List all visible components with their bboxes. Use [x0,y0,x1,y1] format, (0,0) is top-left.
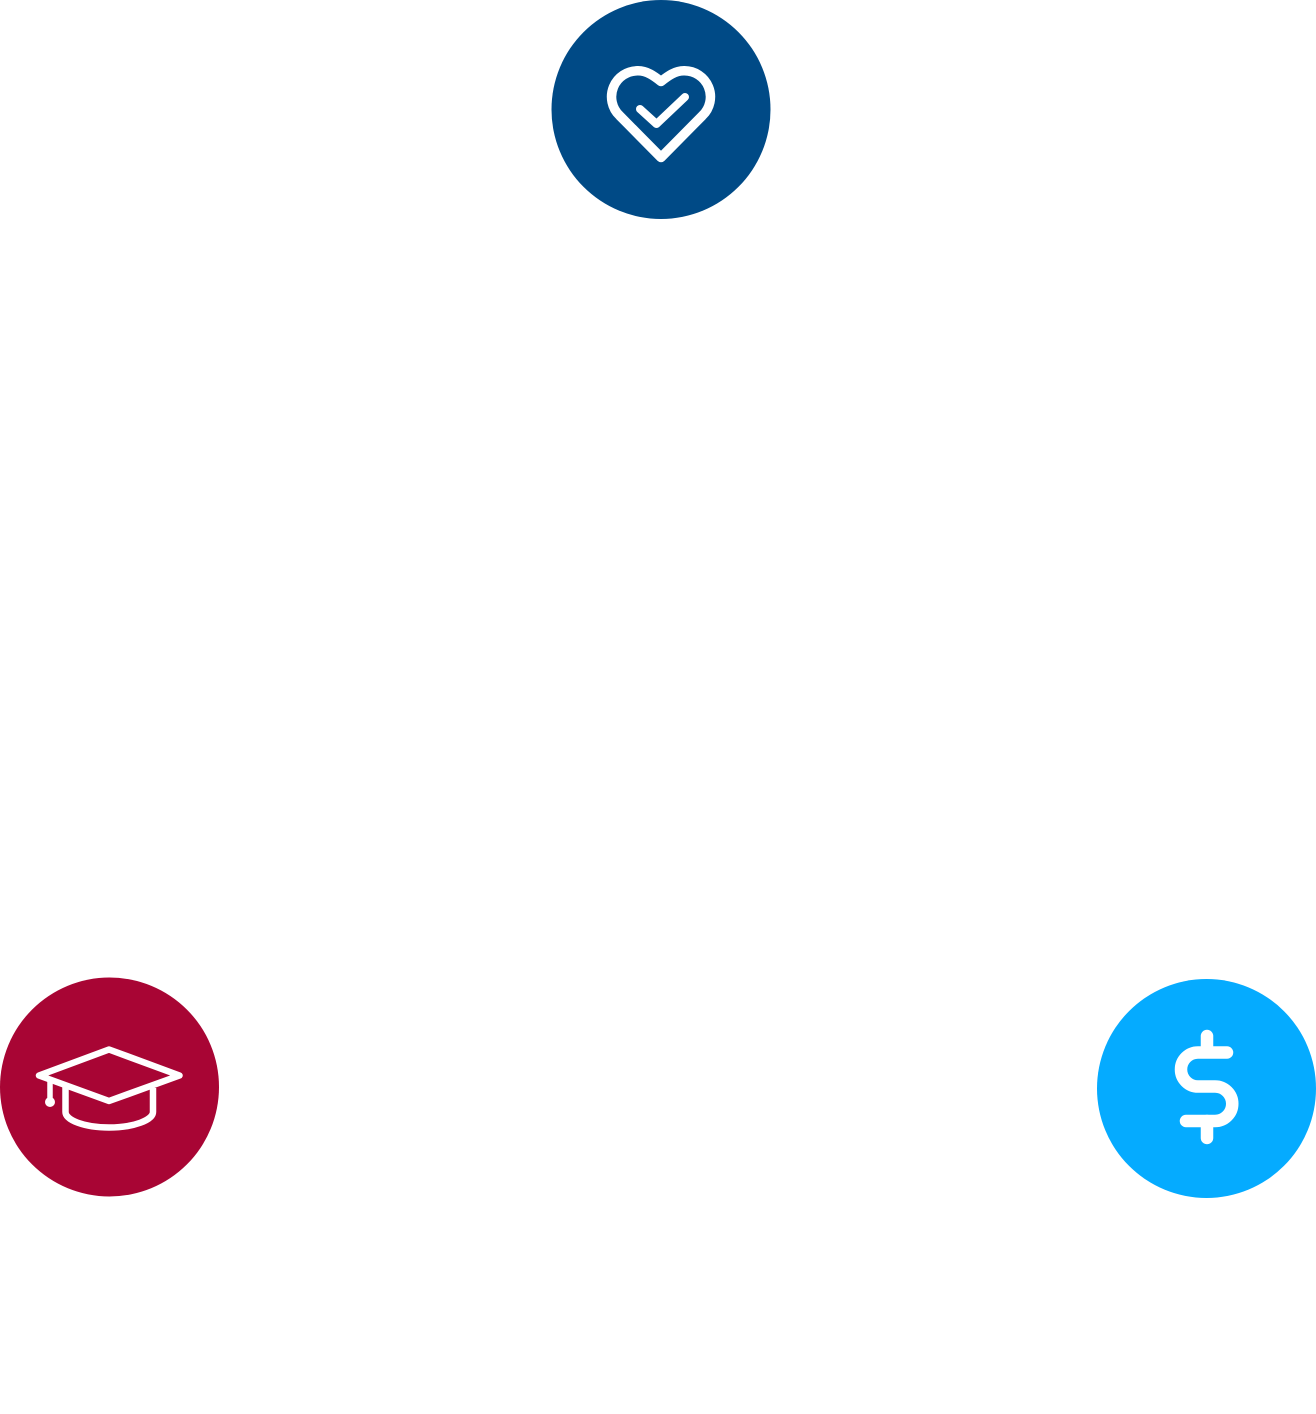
icon: health heart with check on navy circle [552,0,770,219]
icon: income dollar sign on bright blue circle [1097,979,1316,1198]
icon: education graduation cap on crimson circle [0,978,219,1196]
